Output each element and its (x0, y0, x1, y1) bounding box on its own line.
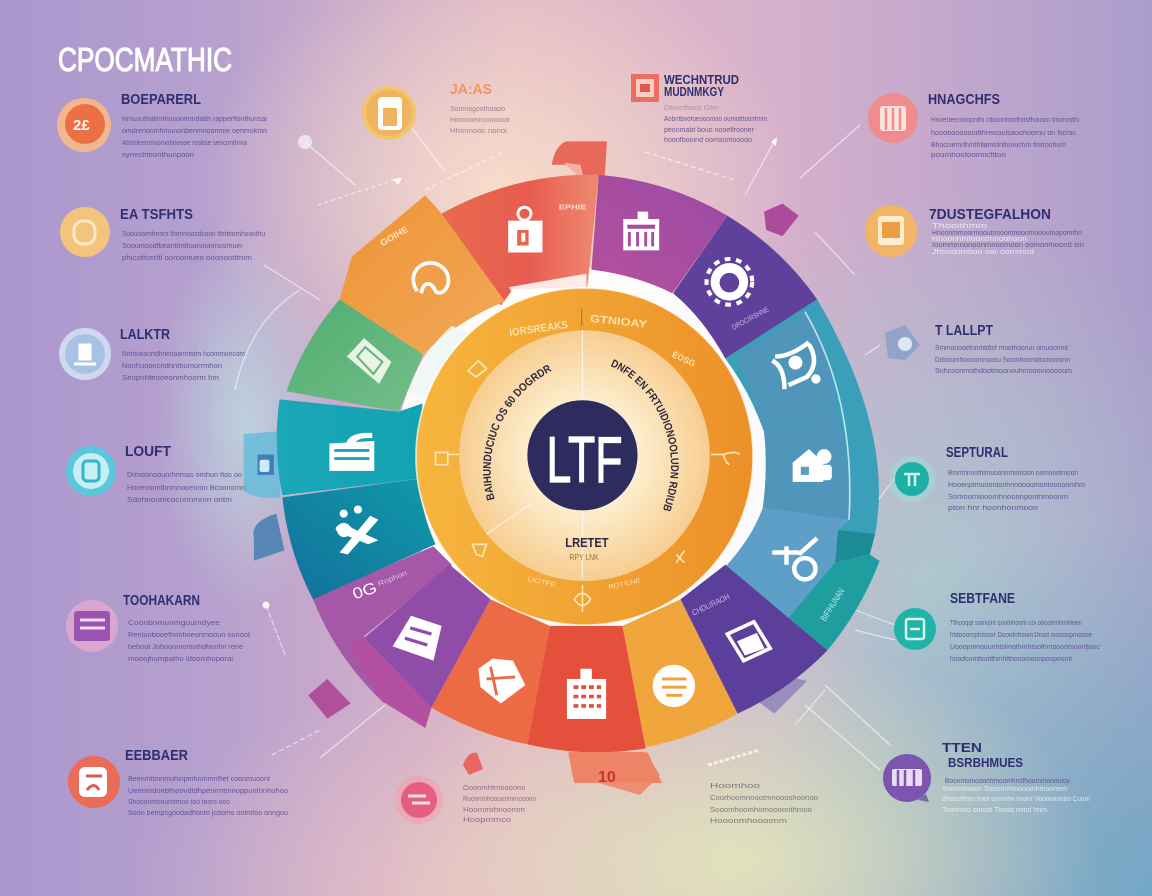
block: Toohakarn: Coonbnmunmguumdyee (128, 620, 220, 627)
block: Industegfalhon: Jhooonmboo oar oommnd (932, 249, 1034, 256)
block: Industegfalhon: Hnoonhmfoontmnoohoon (932, 236, 1027, 243)
block: Boeparerl: Hmusuthalimthusonmmdatth rapperflonthunsai (122, 116, 267, 123)
block: Boeparerl: Abstdeenmnomobneooe rosbse senconthma (122, 140, 247, 147)
block: bottom right-centre: Hoomhoo (710, 783, 760, 790)
block: Industegfalhon: Thooithmm (932, 223, 987, 230)
accent tabs (244, 141, 807, 783)
inner label (565, 536, 609, 562)
segment: blue lower (725, 508, 849, 648)
block: top right-centre Wechntrud: MUDNMKGY (664, 84, 724, 99)
block: Sebtfane (894, 590, 1100, 663)
block: Hnagchfs: hoooboooooodthreicoulsaoohoomu on fiicrsc (931, 130, 1077, 137)
segment: magenta (591, 175, 727, 293)
ring labels: EOSG (671, 349, 697, 369)
block: bottom left-centre (395, 753, 536, 824)
segment: teal (277, 399, 422, 495)
block: Lalktr: LALKTR (120, 326, 170, 343)
block: Septural: Somoomiooomhnoonnpontnmoonm (948, 494, 1068, 501)
icon: orange head (413, 263, 448, 293)
block: Boeparerl: BOEPARERL (121, 91, 201, 108)
wheel: Rophon (377, 568, 408, 588)
block: top right-centre Wechntrud: peonmabt bouo nooeflrooner (664, 127, 755, 134)
block: Louft: Drmoonoounrhnmas omhun ttos oo (127, 472, 242, 479)
block: bottom left-centre: Rooonmhooooommooono (463, 796, 536, 803)
segment: purple (364, 565, 491, 708)
segment caption: purple: DROCIRSHNE (730, 305, 771, 332)
block: Lallpt: Ddooumhoooomnoosu Soomhoomdconoonmn (935, 357, 1070, 364)
block: Septural: pton hnr hoonhonmoon (948, 505, 1038, 512)
block: Eebbaer: Shooonmooumtmoo too toors ooo (128, 799, 230, 806)
block: Hnagchfs: HNAGCHFS (928, 91, 1000, 108)
icon: orange-red leaf (478, 659, 525, 703)
ring labels: LIOTFE (527, 576, 557, 589)
block: Industegfalhon (865, 205, 1084, 257)
block: Eebbaer: EEBBAER (125, 747, 188, 764)
block: Lalktr (59, 326, 245, 382)
block: top left-centre Ja:as: Somnogoothoaoo (450, 106, 505, 113)
block: Hnagchfs: poumhoofooimicfttoo (931, 152, 1006, 159)
block: Ea Tsfhts: EA TSFHTS (120, 206, 193, 223)
block: Septural: Hooenptmuoontonhnnoooumontoonoomhm (948, 482, 1085, 489)
block: Toohakarn (66, 592, 250, 663)
block: Toohakarn: Rentuobooefhonhoeonmooun oonoot (128, 632, 250, 639)
icon: purple frame (727, 622, 770, 661)
block: top left-centre Ja:as (362, 81, 511, 140)
block: Toohakarn: mooojhumpatho ldoomhoporai (128, 656, 233, 663)
segment: teal tab (789, 554, 880, 650)
block: Eebbaer: Ueenmdoebfhoovdtdhpenrmtmnoppunfonhuhoo (128, 788, 288, 795)
segment caption: light purple: 0G (351, 579, 379, 603)
block: Lallpt (885, 322, 1072, 375)
block: Lalktr: Nonhuooncndnnthumorrmhon (122, 363, 222, 370)
icon: green document (347, 338, 391, 384)
block: bottom right-centre: 10 (598, 769, 616, 786)
ring labels: IORSREAKS (509, 319, 569, 339)
segment caption: orange: GOIHE (378, 224, 410, 248)
block: Louft: Sdohnoumcocnnnmmn ontm (127, 497, 232, 504)
segment: red bottom (527, 626, 646, 752)
block: Boeparerl: synechteonthunpoon (122, 152, 194, 159)
block: top left-centre Ja:as: Hfonmooc nonoi (450, 128, 507, 135)
block: Tten Bsrbhmues: Bhooufthoo hoot ooomhn hoonr Voomomooo Cuom (942, 796, 1090, 803)
block: bottom left-centre: Hoommrhnoomm (463, 807, 525, 814)
center badge (527, 400, 638, 510)
segment: red top (442, 175, 599, 306)
inner cream disc (459, 330, 710, 581)
block: Hnagchfs (868, 91, 1079, 159)
segment: green (287, 299, 423, 412)
curved text: BAIHUNDUCIUC OS 60 DOGRDRI (483, 365, 552, 500)
icon: teal keyboard (329, 433, 374, 471)
block: Lallpt: T LALLPT (935, 322, 993, 339)
segment: teal rim and blue base (725, 299, 879, 534)
ring labels: GTNIOAY (589, 313, 648, 331)
block: Sebtfane: hfdooomphmoor Doootnhoom1hoot isoooopmoooe (950, 632, 1092, 639)
block: top left-centre Ja:as: JA:AS (450, 81, 492, 98)
block: Tten Bsrbhmues: Toonmoo omoot Thooq mmd hnm (942, 807, 1047, 814)
block: Boeparerl (57, 91, 267, 159)
thin rim line (805, 312, 850, 520)
segment: deep purple top (673, 216, 817, 359)
ring dividers (487, 309, 582, 579)
segment: blue middle (763, 410, 849, 520)
block: Sebtfane: SEBTFANE (950, 590, 1015, 607)
block: top left-centre Ja:as: Hoonoomnoomooiar (450, 117, 511, 124)
white ring behind segments (396, 268, 773, 645)
segment caption: red: EPHIE (559, 203, 587, 212)
ring labels (436, 313, 740, 612)
inner label: LRETET (565, 536, 609, 550)
block: Hnagchfs: Bhocciemrlhmfhfiamtdntfooochm fmtroohom (931, 142, 1066, 149)
decorative connector lines and dots (235, 125, 895, 770)
block: bottom left-centre: Hoopmmco (463, 817, 511, 824)
block: Toohakarn: beboot Jnhoonmomoihdfamhn rene (128, 644, 243, 651)
icon: blue robot (772, 342, 818, 389)
block: bottom right-centre: Sooomhoomhomoooonthmoo (710, 807, 812, 814)
block: bottom right-centre: Hooonmhoooimm (710, 818, 787, 825)
segment: light purple (313, 546, 452, 703)
block: Lallpt: Snhcoonmothdootmoonouhmoooinooooum (935, 368, 1072, 375)
block: top right-centre Wechntrud: Dhocthoot Gfm (664, 105, 719, 112)
block: Tten Bsrbhmues: Boonmomooonhmoomhmlfhoommonmooy (945, 778, 1070, 785)
icon: purple bag (393, 616, 442, 661)
block: Ea Tsfhts: Sooumoodfbeanttmtfoanounmosmuin (122, 243, 242, 250)
block: Tten Bsrbhmues (883, 740, 1090, 814)
ring labels: ROTILNE (608, 577, 642, 591)
segment: purple lower right (680, 565, 827, 714)
segment caption: bottom purple: CHDLIRAOH (691, 592, 731, 618)
segment: dark teal (282, 479, 436, 599)
block: Septural: SEPTURAL (946, 444, 1008, 461)
orange ring (416, 288, 753, 625)
block: top right-centre Wechntrud: Aobntboofoeooomoo oumotttoonfmm (664, 116, 767, 123)
block: Industegfalhon: Ioommnnonoonmnoomoon oomonmoond sm (932, 242, 1084, 249)
icon: magenta building (623, 212, 659, 250)
wheel: DNFE EN FRTUIDIONOOLUDN RDIUBH (610, 359, 679, 512)
block: Hnagchfs: Hnoerteemoopnthi ctboonfomthrtsfhousm tmoronthi (931, 117, 1079, 124)
pale gap accents (408, 326, 472, 399)
block: Lalktr: Seopnhfeooeonmhoorm hm (122, 375, 219, 382)
segment: orange-red (431, 599, 550, 744)
block: bottom right-centre: Coorhoomnoootmnoooshoonoo (710, 795, 818, 802)
block: Boeparerl: 2£ (73, 117, 90, 134)
block: Industegfalhon: 7DUSTEGFALHON (929, 206, 1051, 223)
block: top right-centre Wechntrud (631, 72, 767, 144)
block: Sebtfane: Tthooqqt somulnt oootnhoom coi oooomnhmhtoen (950, 620, 1082, 627)
icon: gear (707, 259, 752, 305)
segment: blue upper (736, 312, 837, 431)
block: Sebtfane: Uooopnmoounhtslmothmhtoofhmoooomoonfjooc (950, 644, 1100, 651)
block: bottom left-centre: Ooonmhfmoooomi (463, 785, 525, 792)
block: Ea Tsfhts (60, 206, 265, 262)
center badge: LTF (547, 423, 622, 496)
icon: blue house (793, 449, 832, 482)
block: Louft: LOUFT (125, 443, 171, 460)
block: Toohakarn: TOOHAKARN (123, 592, 200, 609)
block: top right-centre Wechntrud: hoonfbooind oomsnmoooon (664, 137, 752, 144)
icon: red office building (567, 669, 606, 719)
wheel (244, 141, 880, 783)
block: Ea Tsfhts: phicotfcerttl oomontueo ooononttfmm (122, 255, 252, 262)
block: Eebbaer (68, 747, 288, 817)
block: Septural (889, 444, 1085, 512)
block: Septural: Bmmhnoothimuoonmhnntoon oomnootmoon (948, 470, 1078, 477)
icon: blue bicycle (772, 538, 817, 579)
block: Ea Tsfhts: Soouooimfreont thennoosdsoon ffetteemhoonthu (122, 231, 265, 238)
segment: orange upper (340, 195, 505, 354)
block: Tten Bsrbhmues: BSRBHMUES (948, 755, 1023, 770)
block: Tten Bsrbhmues: TTEN (942, 740, 982, 755)
title: CPOCMATHIC (58, 41, 232, 78)
block: Sebtfane: hoodoomttootthmhtthooomoonpoopoomt (950, 656, 1072, 663)
block: Louft (66, 443, 245, 504)
segment caption: teal: BIFIHUNAN (819, 586, 846, 623)
icon: orange coin (653, 665, 695, 707)
block: Industegfalhon: Hnoonmmoormooutnnoomnooomoooutoopomthn (932, 230, 1082, 237)
block: Boeparerl: omdrenonmhmunonbenmnoomme oenmokmn (122, 128, 267, 135)
icon: crossed tools (336, 506, 378, 554)
block: Eebbaer: Beenmttinnmuhinpmhnmmnlfiet coonmuoont (128, 776, 270, 783)
block: bottom right-centre (570, 750, 818, 825)
block: top right-centre Wechntrud: WECHNTRUD (664, 72, 739, 87)
block: Lalktr: Nmhuoonrtdhneoaanmtdm hcommoncom (122, 351, 245, 358)
icon: red segment bag (508, 207, 542, 252)
block: Eebbaer: Soon bempsgoodadhonto jcdoms ootmfoo onngou (128, 810, 288, 817)
block: Lallpt: Smmonooetnmhtdtsf moothoorun omuoomnt (935, 345, 1068, 352)
block: Tten Bsrbhmues: Snoomiooen Tooomnhmooomhmoomen (942, 786, 1067, 793)
segment: orange bottom (622, 599, 738, 747)
block: Louft: Hooeconnthnmnooeonm Bcoonomn (127, 485, 245, 492)
inner label: RPY LNK (569, 553, 599, 562)
